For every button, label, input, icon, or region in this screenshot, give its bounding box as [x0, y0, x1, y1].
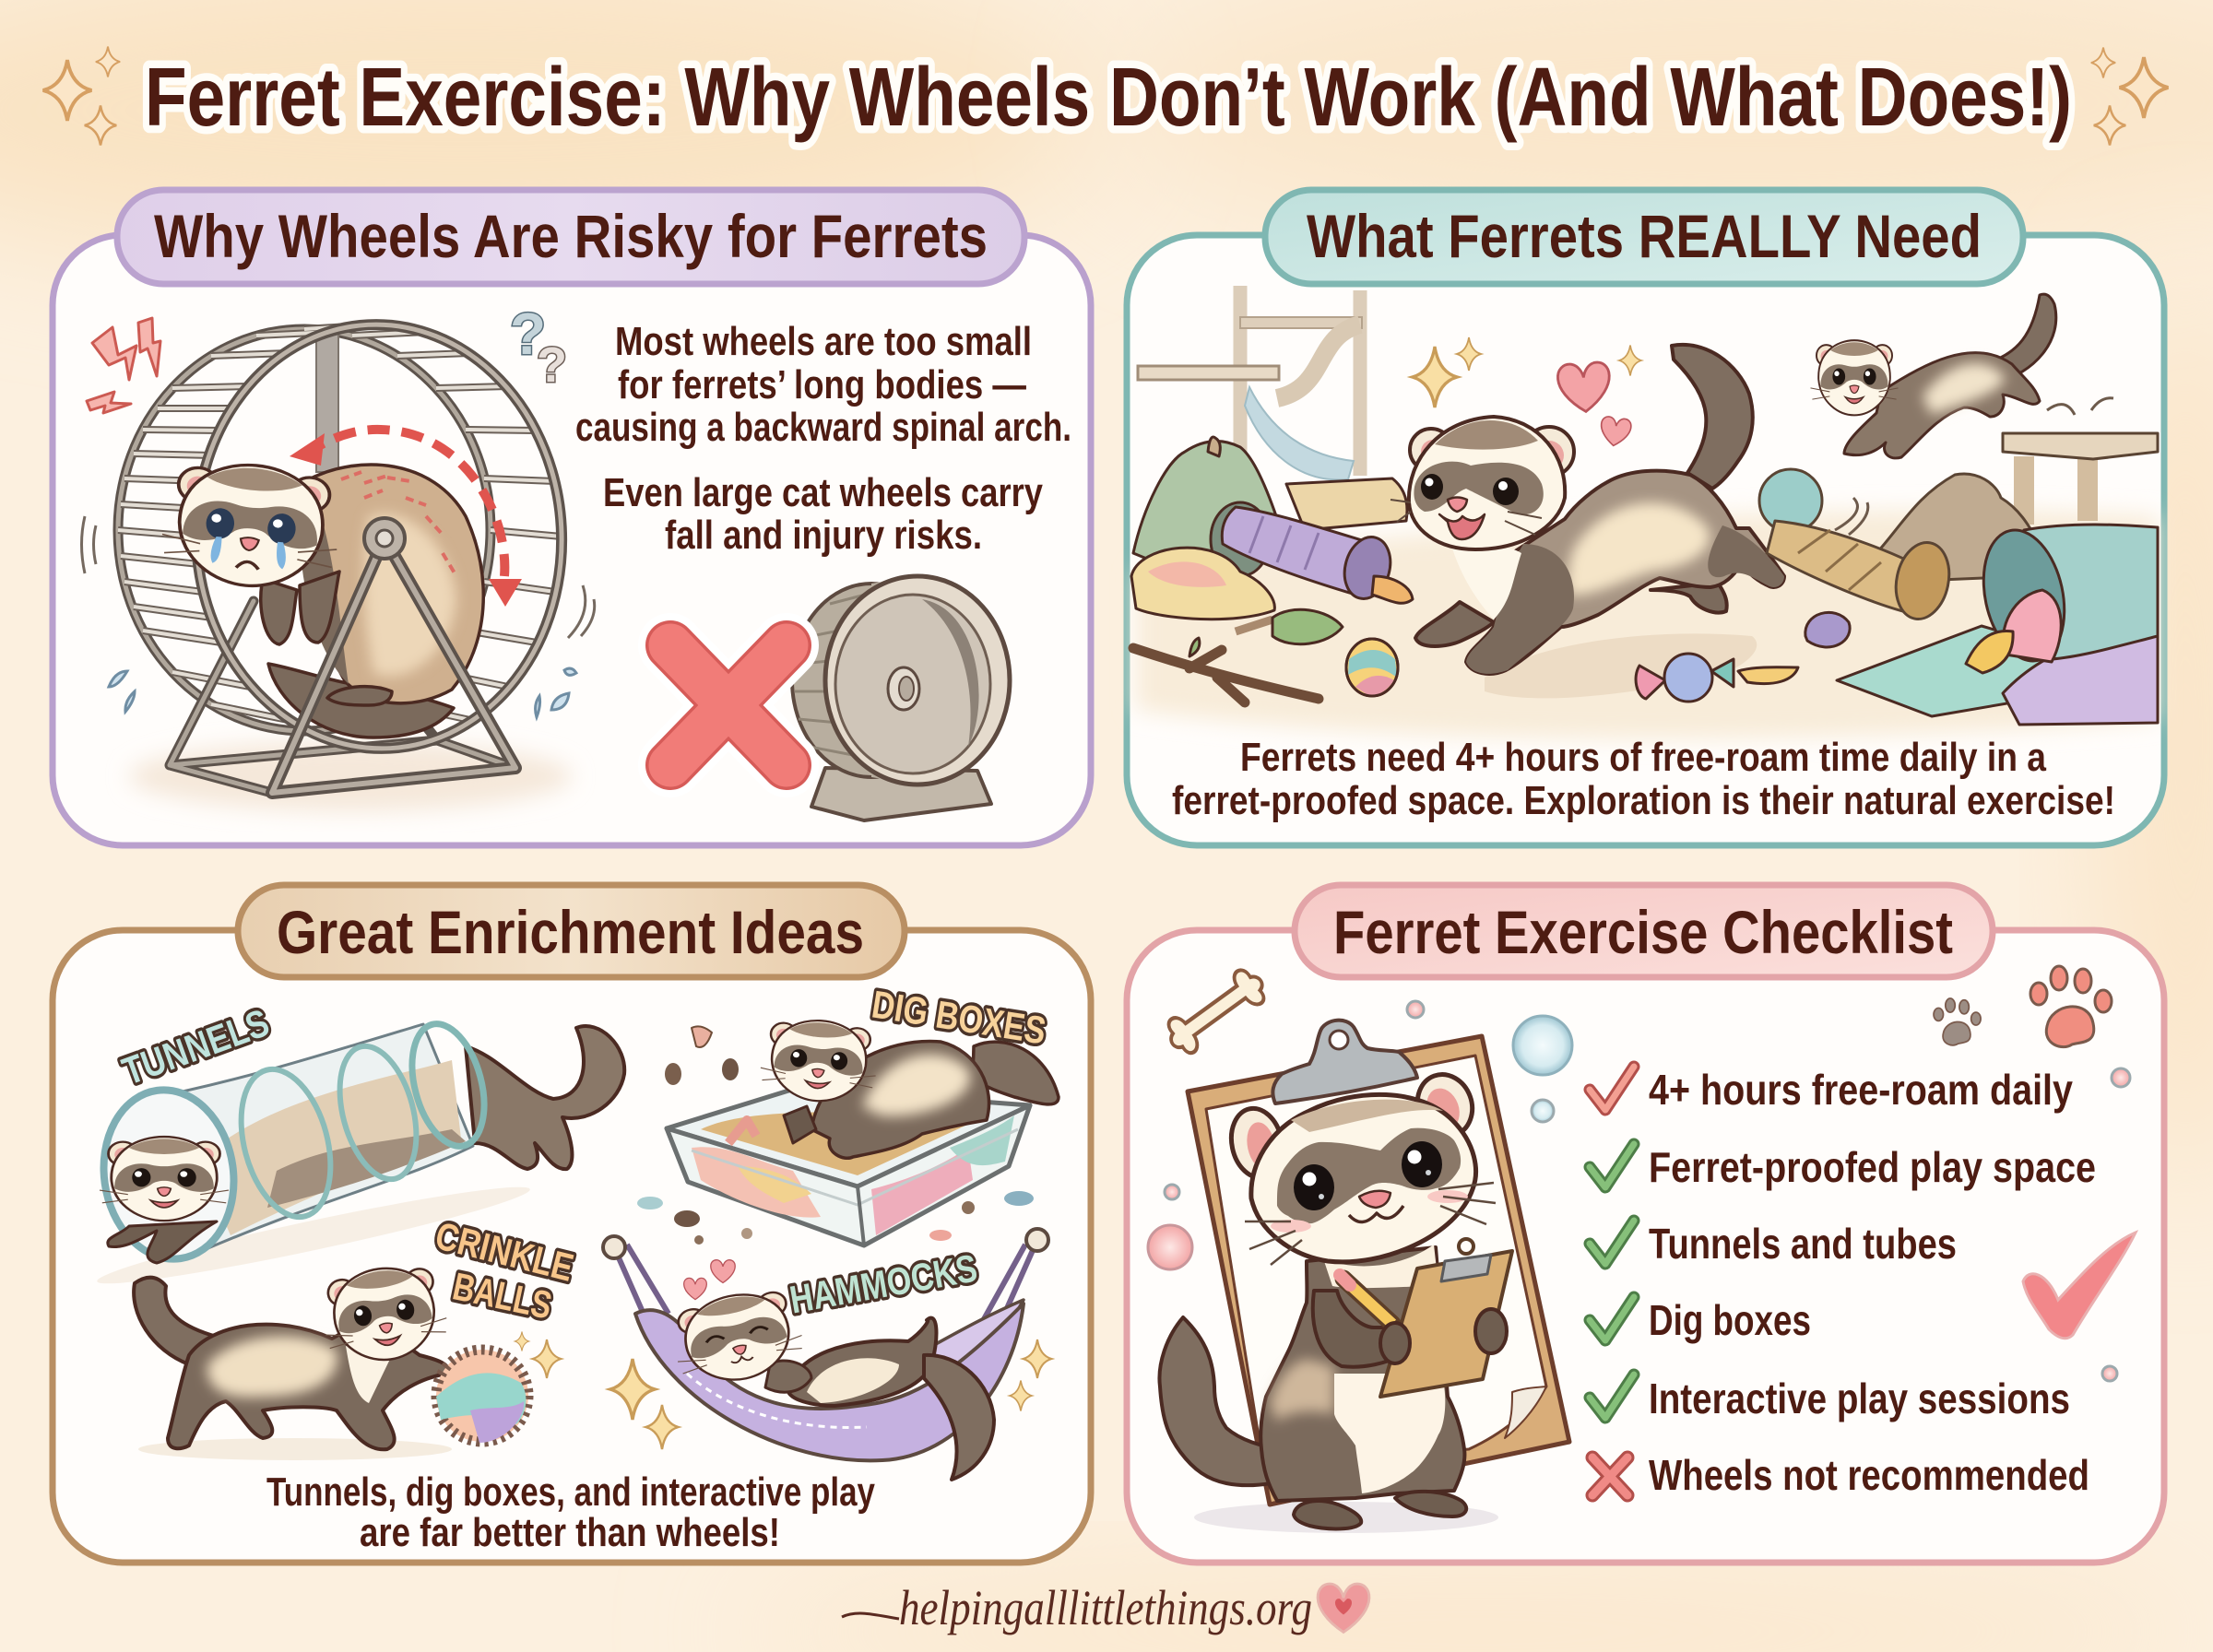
body text: wheels too small: Most wheels are too small: [615, 319, 1032, 364]
ferret head: standing: [1225, 1067, 1496, 1265]
panel: great enrichment ideas: [53, 885, 1091, 1563]
checklist: [1590, 1066, 2096, 1499]
illustration: dig box: [637, 1026, 1059, 1245]
label: hammocks: HAMMOCKS: [787, 1246, 980, 1321]
sparkles and hearts: [1413, 337, 1641, 448]
body text: enrichment summary: are far better than wheels!: [360, 1510, 780, 1555]
body text: wheels too small: [575, 319, 1071, 558]
illustration: stool and rock: [1759, 398, 2158, 624]
label: crinkle balls: CRINKLE: [432, 1213, 578, 1290]
clip hole: [1330, 1031, 1348, 1049]
check item 5: Interactive play sessions: [1649, 1375, 2070, 1422]
icon: red X: [670, 645, 787, 765]
tail: [1672, 345, 1753, 489]
ferret sad face: [159, 458, 344, 593]
check item 4: [1590, 1296, 1811, 1344]
label: dig boxes: DIG BOXES: [869, 982, 1048, 1053]
motion lines and sweat drops: [81, 516, 595, 717]
label: tunnels: TUNNELS: [117, 1000, 275, 1093]
icon: hamster wheel with red X: [670, 576, 1010, 820]
check item 1: 4+ hours free-roam daily: [1649, 1066, 2073, 1114]
small toys: [1636, 612, 1850, 702]
heading pill: why wheels are risky: Why Wheels Are Risky for Ferrets: [154, 202, 988, 270]
illustration: standing ferret body: [1159, 1245, 1466, 1528]
ferret face: sleeping: [667, 1283, 808, 1391]
illustration: big clipboard: [1188, 1036, 1569, 1533]
illustration: hammock: [603, 1229, 1048, 1480]
crinkle ball: [436, 1331, 561, 1443]
label: crinkle balls: BALLS: [449, 1264, 556, 1328]
icon: lightning marks: [87, 318, 160, 413]
body text: wheels too small: fall and injury risks.: [665, 513, 982, 558]
body text: wheels too small: for ferrets’ long bodies —: [618, 362, 1026, 407]
check item 3: Tunnels and tubes: [1649, 1220, 1957, 1268]
icon: bone: [1160, 963, 1272, 1059]
illustration: tunnel with ferret: [93, 1016, 624, 1296]
icon: paw prints: [1934, 966, 2112, 1047]
white chest: [1452, 546, 1521, 620]
body text: enrichment summary: Tunnels, dig boxes, and interactive play: [266, 1469, 875, 1515]
heading pill: what ferrets need: What Ferrets REALLY Need: [1307, 202, 1982, 270]
heading pill: what ferrets need: [1265, 190, 2023, 284]
body text: wheels too small: causing a backward spinal arch.: [575, 405, 1071, 450]
floor wash: [1136, 511, 2158, 738]
body text: wheels too small: Even large cat wheels carry: [603, 470, 1043, 515]
main body: [1466, 471, 1784, 674]
cross item 6: Wheels not recommended: [1649, 1451, 2089, 1499]
panel: what ferrets really need: [1127, 190, 2164, 845]
body text: free-roam: Ferrets need 4+ hours of free-roam time daily in a: [1240, 735, 2046, 780]
body text: free-roam: [1172, 735, 2115, 823]
far hind leg: [1651, 583, 1727, 613]
check item 2: Ferret-proofed play space: [1649, 1143, 2096, 1191]
illustration: ferret in wheel: [118, 315, 573, 811]
illustration: toys and tunnels left: [1131, 437, 1413, 702]
check item 4: Dig boxes: [1649, 1296, 1811, 1344]
icon: question marks: ?: [537, 337, 567, 393]
heading pill: why wheels are risky: [117, 190, 1024, 284]
icon: heart: [1318, 1584, 1369, 1632]
illustration: clipboard clip: [1272, 1021, 1417, 1103]
ferret face: tunnel: [100, 1137, 229, 1221]
heading pill: checklist: Ferret Exercise Checklist: [1333, 898, 1953, 966]
ferret body in wheel: [261, 465, 483, 738]
illustration: ferret with crinkle ball: [134, 1278, 452, 1460]
illustration: play frame: [1138, 286, 1362, 479]
heading pill: enrichment: [238, 885, 905, 977]
arrow: spinal arch: [290, 430, 522, 607]
ferret face: crinkle: [317, 1260, 451, 1368]
hammock sparkles and hearts: [610, 1260, 1051, 1449]
ferret face: jumping: [1811, 340, 1898, 415]
illustration: big running ferret: [1415, 345, 1784, 698]
far front leg: [1415, 602, 1494, 646]
heading pill: enrichment: Great Enrichment Ideas: [277, 898, 864, 966]
heading pill: checklist: [1295, 885, 1993, 977]
ferret face: dig box: [759, 1017, 879, 1104]
bubbles: [1148, 1001, 2130, 1381]
wheel stand front: [272, 518, 515, 793]
icon: question marks: [510, 301, 567, 393]
body text: enrichment summary: [266, 1469, 875, 1555]
illustration: arm, small clipboard and pencil: [1313, 1239, 1512, 1397]
illustration: jumping ferret: [1844, 294, 2056, 458]
footer: website: helpingalllittlethings.org: [899, 1580, 1312, 1635]
panel: why wheels are risky: [53, 190, 1091, 845]
illustration: teal tunnel and mat: [1837, 523, 2158, 725]
icon: question marks: ?: [510, 301, 546, 367]
ferret head: big running: [1391, 417, 1574, 549]
tail: [1159, 1317, 1277, 1485]
icon: large check mark: [2023, 1233, 2136, 1339]
label: crinkle balls: [432, 1213, 578, 1328]
sparkles left of title: [43, 46, 120, 146]
sparkles right of title: [2091, 48, 2168, 146]
panel: ferret exercise checklist: [1127, 885, 2164, 1563]
